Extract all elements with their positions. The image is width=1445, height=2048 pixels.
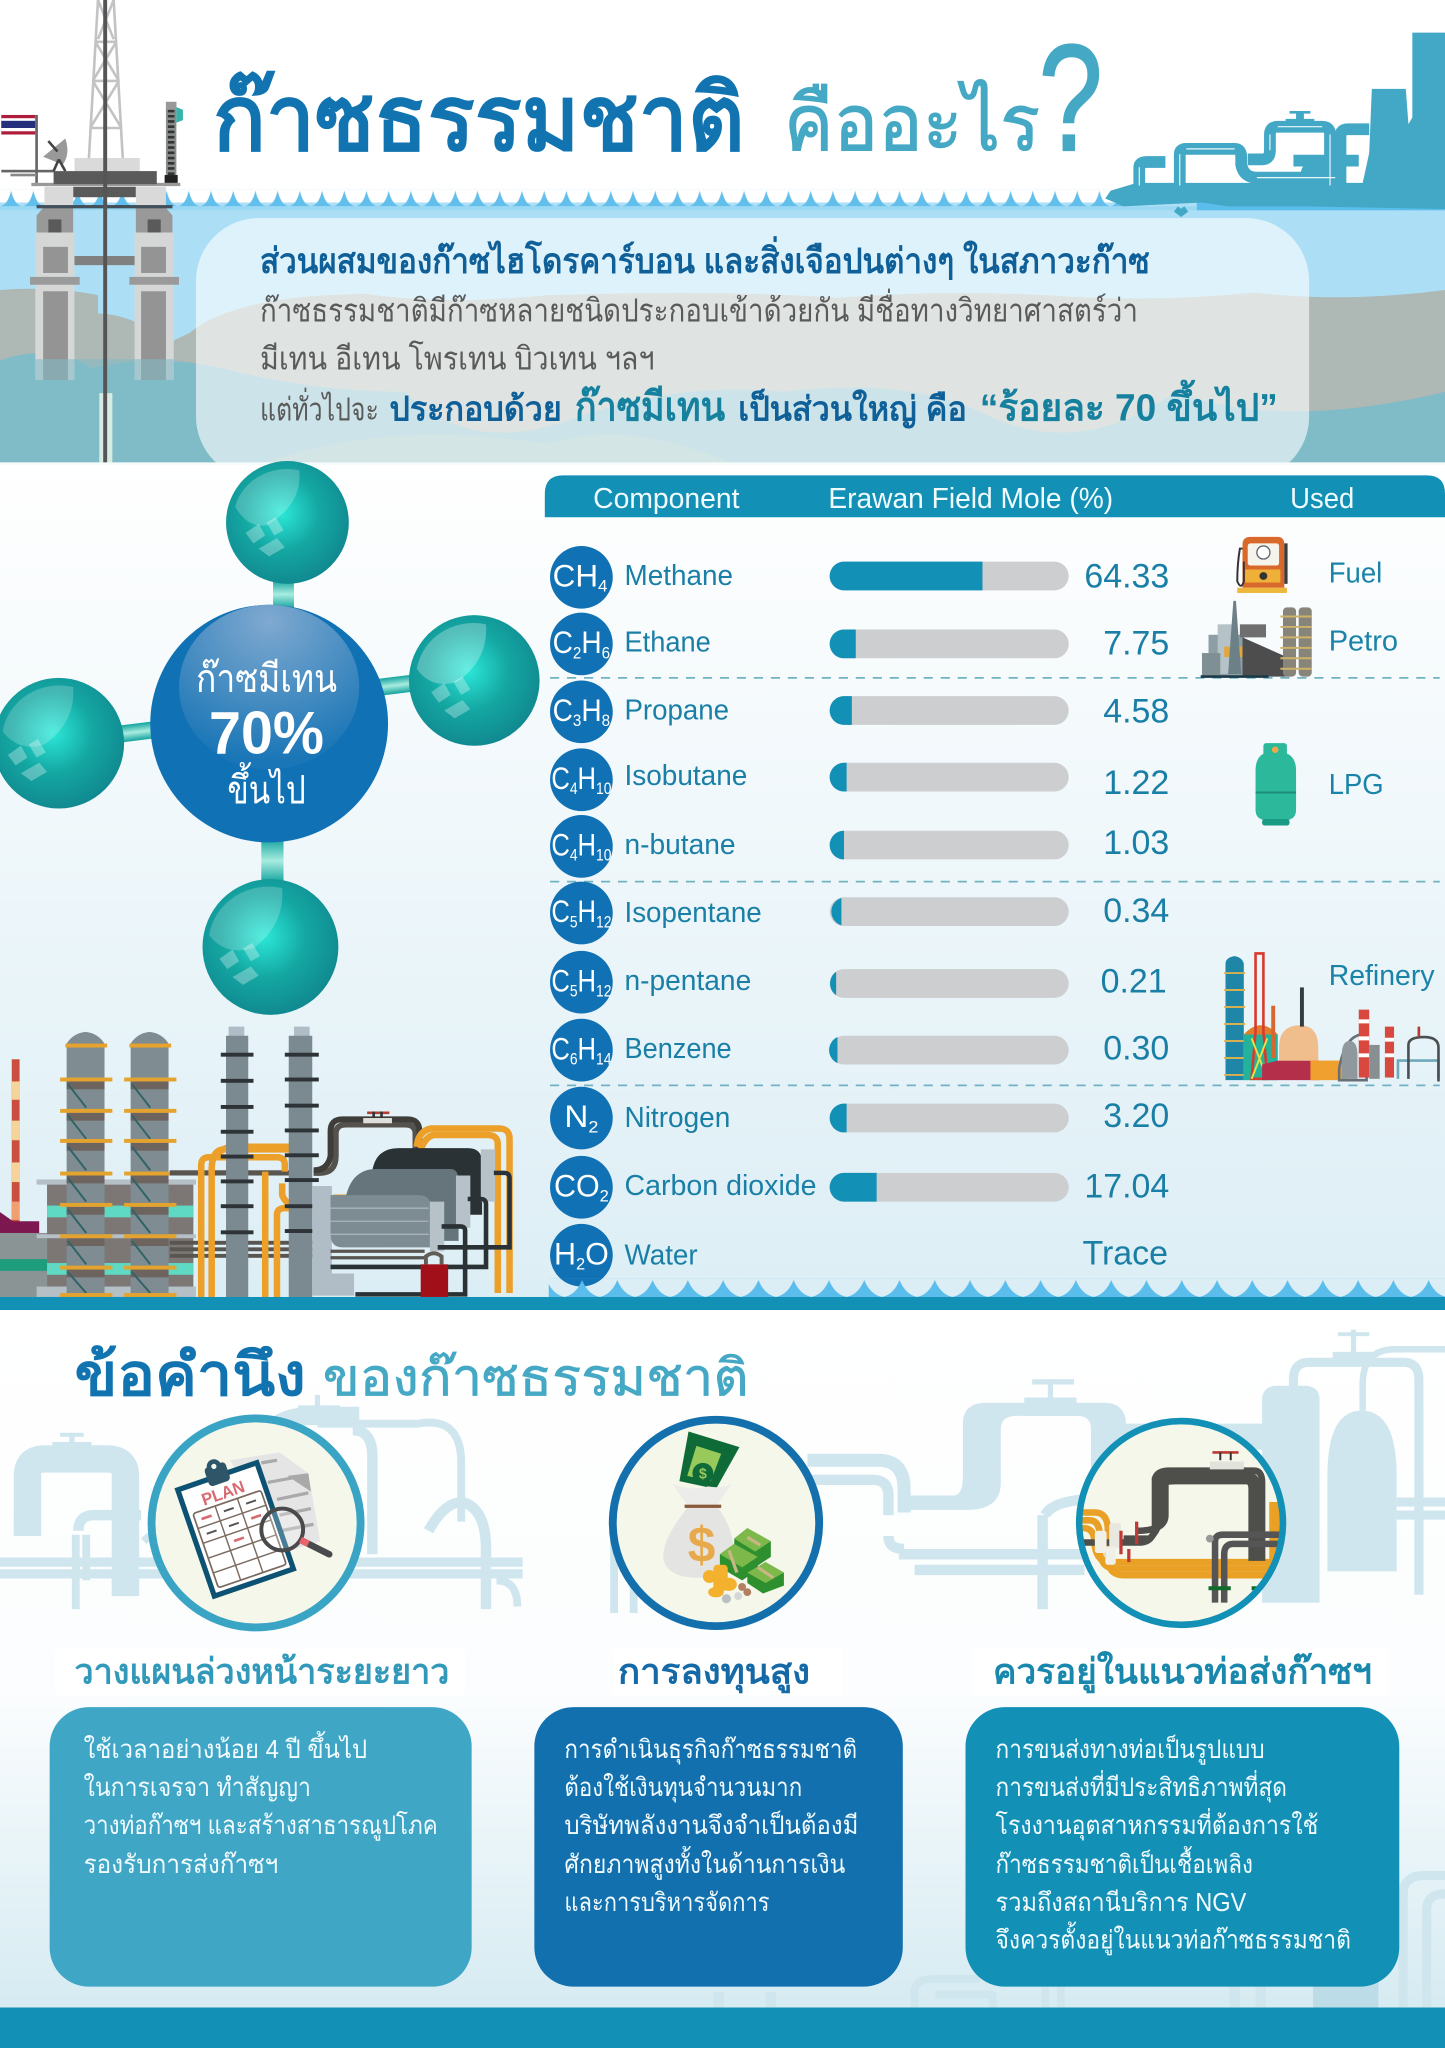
thai flag bbox=[1, 115, 38, 183]
row: isobutane: H bbox=[578, 761, 596, 796]
bag: $ bbox=[688, 1517, 715, 1573]
center atom: ก๊าซมีเทน bbox=[196, 658, 337, 701]
row: methane: 64.33 bbox=[1084, 558, 1169, 596]
title: ก๊าซธรรมชาติ bbox=[213, 68, 745, 170]
definition line 3: มีเทน อีเทน โพรเทน บิวเทน ฯลฯ bbox=[260, 341, 655, 377]
atom top bbox=[226, 461, 349, 584]
panel: planning text: ใช้เวลาอย่างน้อย 4 ปี ขึ้นไป bbox=[84, 1731, 367, 1764]
panel: planning text: ในการเจรจา ทำสัญญา bbox=[84, 1773, 311, 1802]
row: ethane: 7.75 bbox=[1103, 624, 1169, 662]
panel: pipeline text: จึงควรตั้งอยู่ในแนวท่อก๊าซธรรมชาติ bbox=[996, 1922, 1351, 1956]
atom right bbox=[409, 615, 540, 746]
definition line 4 bbox=[260, 380, 1278, 430]
label: petro: Petro bbox=[1329, 625, 1398, 657]
row: benzene: 14 bbox=[596, 1049, 611, 1068]
row: carbon dioxide: CO bbox=[554, 1168, 601, 1203]
row: n-pentane: C bbox=[551, 963, 574, 998]
row: nitrogen: N bbox=[564, 1099, 587, 1134]
center atom: ขึ้นไป bbox=[227, 761, 306, 812]
row: isopentane: H bbox=[578, 894, 596, 929]
row: benzene: 6 bbox=[570, 1049, 578, 1068]
row: isobutane: 1.22 bbox=[1103, 764, 1169, 802]
coins bbox=[703, 1565, 751, 1603]
row: nitrogen bbox=[550, 1087, 1169, 1149]
magnifier bbox=[261, 1509, 329, 1554]
row: water bbox=[550, 1224, 1168, 1287]
panel: planning text: รองรับการส่งก๊าซฯ bbox=[84, 1851, 278, 1879]
row: water: Trace bbox=[1082, 1234, 1168, 1272]
left pipes bbox=[0, 1395, 523, 1609]
row: ethane: 2 bbox=[573, 643, 581, 662]
table header bbox=[545, 475, 1445, 517]
row: isopentane: 0.34 bbox=[1103, 892, 1169, 930]
row: benzene: 0.30 bbox=[1103, 1029, 1169, 1067]
row: carbon dioxide: 17.04 bbox=[1084, 1168, 1169, 1206]
section divider bar bbox=[0, 1297, 1445, 1310]
subheading: long-term planning: วางแผนล่วงหน้าระยะยาว bbox=[74, 1653, 449, 1692]
row: n-butane bbox=[550, 815, 1169, 878]
subheading: high investment: การลงทุนสูง bbox=[618, 1653, 810, 1694]
row: n-butane: 1.03 bbox=[1103, 824, 1169, 862]
dark pipes bottom bbox=[331, 1173, 510, 1294]
row: n-butane: 4 bbox=[570, 846, 578, 865]
row: isobutane bbox=[550, 748, 1169, 811]
row: propane bbox=[550, 680, 1169, 743]
red box bbox=[421, 1264, 448, 1297]
row: isopentane bbox=[550, 882, 1169, 944]
row: ethane: H bbox=[581, 625, 602, 660]
row: methane: 4 bbox=[598, 577, 608, 596]
row: water: Water bbox=[625, 1239, 698, 1271]
row: ethane: C bbox=[553, 625, 575, 660]
row: methane bbox=[550, 546, 1169, 609]
row: isobutane: 4 bbox=[570, 779, 578, 798]
group dividers bbox=[550, 678, 1440, 1085]
label: fuel: Fuel bbox=[1329, 558, 1382, 590]
row: propane: H bbox=[581, 693, 602, 728]
row: nitrogen: Nitrogen bbox=[625, 1102, 730, 1134]
chimney bbox=[12, 1059, 20, 1233]
middle section background bbox=[0, 464, 1445, 1297]
center atom: 70% bbox=[209, 700, 324, 767]
refinery illustration bbox=[0, 1027, 510, 1297]
row: benzene: Benzene bbox=[625, 1033, 732, 1065]
orange pipes right bbox=[333, 1128, 510, 1293]
silhouette: gas plant bbox=[1105, 33, 1445, 213]
center atom bbox=[150, 605, 388, 842]
row: methane: CH bbox=[553, 558, 598, 593]
row: n-butane: H bbox=[578, 828, 596, 863]
stacks bbox=[221, 1027, 319, 1297]
banknote bbox=[679, 1432, 739, 1489]
row: n-butane: n-butane bbox=[625, 829, 736, 861]
subheading: along pipeline: ควรอยู่ในแนวท่อส่งก๊าซฯ bbox=[993, 1651, 1372, 1694]
row: water: H bbox=[554, 1236, 577, 1271]
background pipe silhouettes bbox=[0, 1330, 1445, 2008]
row: isobutane: Isobutane bbox=[625, 760, 747, 792]
panel: investment text bbox=[534, 1707, 903, 1987]
methane molecule bbox=[0, 461, 540, 1015]
panel: planning text: วางท่อก๊าซฯ และสร้างสาธารณูปโภค bbox=[84, 1811, 438, 1841]
orange pipe bundle bbox=[1074, 1512, 1287, 1575]
panel: investment text: ศักยภาพสูงทั้งในด้านการเงิน bbox=[564, 1846, 845, 1880]
icon: lpg cylinder bbox=[1256, 743, 1296, 825]
panel: investment text: ต้องใช้เงินทุนจำนวนมาก bbox=[564, 1773, 802, 1803]
row: propane: 4.58 bbox=[1103, 692, 1169, 730]
icon: petrochemical plant bbox=[1201, 601, 1312, 678]
orange pipes left bbox=[201, 1147, 294, 1297]
row: methane: Methane bbox=[625, 560, 733, 592]
subheading: high investment bbox=[613, 1648, 843, 1695]
pipe fittings bbox=[1095, 1452, 1244, 1565]
atom left bbox=[0, 678, 124, 808]
definition line 2: ก๊าซธรรมชาติมีก๊าซหลายชนิดประกอบเข้าด้วยกัน มีชื่อทางวิทยาศาสตร์ว่า bbox=[260, 288, 1138, 328]
row: n-pentane: n-pentane bbox=[625, 965, 751, 997]
row: n-butane: 10 bbox=[596, 846, 611, 865]
row: isobutane: 10 bbox=[596, 779, 611, 798]
table header: Used bbox=[1290, 483, 1354, 515]
valve bbox=[363, 1112, 392, 1123]
row: n-pentane: H bbox=[578, 963, 596, 998]
wave band bbox=[0, 189, 1445, 210]
panel: investment text: การดำเนินธุรกิจก๊าซธรรมชาติ bbox=[564, 1736, 857, 1765]
section heading: ของก๊าซธรรมชาติ bbox=[323, 1349, 749, 1406]
row: carbon dioxide: Carbon dioxide bbox=[625, 1170, 817, 1202]
panel: pipeline text: รวมถึงสถานีบริการ NGV bbox=[996, 1889, 1246, 1917]
row: isopentane: 12 bbox=[596, 912, 611, 931]
definition heading: ส่วนผสมของก๊าซไฮโดรคาร์บอน และสิ่งเจือปนต่างๆ ในสภาวะก๊าซ bbox=[260, 236, 1150, 281]
definition line 4: “ร้อยละ 70 ขึ้นไป” bbox=[980, 380, 1278, 430]
icon: pipeline bbox=[1074, 1421, 1287, 1625]
satellite dish bbox=[43, 138, 67, 171]
title bbox=[213, 14, 1103, 183]
definition line 4: แต่ทั่วไปจะ bbox=[260, 388, 379, 428]
bottom pipes bbox=[719, 1876, 1445, 2008]
row: propane: Propane bbox=[625, 695, 729, 727]
bottom waves of table bbox=[549, 1279, 1445, 1297]
cash stacks bbox=[720, 1528, 784, 1593]
header sea background bbox=[0, 202, 1445, 464]
bag bbox=[663, 1484, 733, 1578]
definition line 4: เป็นส่วนใหญ่ คือ bbox=[738, 388, 967, 430]
document bbox=[230, 1452, 320, 1552]
panel: pipeline text: การขนส่งทางท่อเป็นรูปแบบ bbox=[996, 1734, 1265, 1765]
icon: planning clipboard bbox=[152, 1418, 361, 1627]
row: n-pentane bbox=[550, 951, 1167, 1014]
row: propane: 8 bbox=[602, 711, 610, 730]
row: isopentane: C bbox=[551, 894, 574, 929]
title: ? bbox=[1039, 14, 1103, 183]
row: isopentane: Isopentane bbox=[625, 897, 762, 929]
panel: pipeline text bbox=[966, 1707, 1399, 1987]
horizontal tanks bbox=[331, 1148, 495, 1251]
row: ethane bbox=[550, 613, 1169, 675]
panel: pipeline text: การขนส่งที่มีประสิทธิภาพที่สุด bbox=[996, 1770, 1287, 1803]
panel: investment text: และการบริหารจัดการ bbox=[564, 1889, 770, 1917]
row: benzene bbox=[550, 1019, 1169, 1081]
row: ethane: 6 bbox=[602, 643, 610, 662]
panel: definition bbox=[196, 218, 1309, 479]
row: n-pentane: 12 bbox=[596, 982, 611, 1001]
row: propane: C bbox=[553, 693, 575, 728]
table header: Erawan Field Mole (%) bbox=[828, 483, 1113, 515]
row: nitrogen: 3.20 bbox=[1103, 1097, 1169, 1135]
row: carbon dioxide bbox=[550, 1156, 1169, 1219]
dark pipes top bbox=[314, 1119, 419, 1173]
row: nitrogen: 2 bbox=[588, 1117, 598, 1136]
icon: refinery bbox=[1224, 953, 1438, 1081]
banknote: $ bbox=[699, 1467, 707, 1483]
label: refinery: Refinery bbox=[1329, 960, 1435, 992]
row: water: O bbox=[585, 1236, 609, 1271]
row: isopentane: 5 bbox=[570, 912, 578, 931]
row: n-pentane: 5 bbox=[570, 982, 578, 1001]
centre pipes bbox=[614, 1379, 1126, 1613]
row: benzene: H bbox=[578, 1031, 596, 1066]
definition line 4: ก๊าซมีเทน bbox=[575, 384, 725, 430]
title: คืออะไร bbox=[784, 79, 1040, 167]
atom bottom bbox=[203, 879, 338, 1015]
row: n-butane: C bbox=[551, 828, 574, 863]
clipboard bbox=[170, 1445, 297, 1599]
row: propane: 3 bbox=[573, 711, 581, 730]
table header: Component bbox=[593, 483, 739, 515]
icon: money bag bbox=[613, 1420, 819, 1626]
lower section background bbox=[0, 1310, 1445, 2008]
right tanks bbox=[1124, 1330, 1445, 1603]
label: lpg: LPG bbox=[1329, 769, 1384, 801]
row: n-pentane: 0.21 bbox=[1101, 963, 1167, 1001]
row: water: 2 bbox=[576, 1255, 585, 1274]
section heading: ข้อคำนึง bbox=[74, 1343, 306, 1408]
panel: planning text bbox=[50, 1707, 472, 1987]
row: isobutane: C bbox=[551, 761, 574, 796]
row: carbon dioxide: 2 bbox=[600, 1187, 609, 1206]
panel: pipeline text: โรงงานอุตสาหกรรมที่ต้องการใช้ bbox=[996, 1808, 1318, 1841]
section heading bbox=[74, 1343, 749, 1408]
distillation towers bbox=[60, 1032, 176, 1297]
row: ethane: Ethane bbox=[625, 627, 711, 659]
rig tower bbox=[89, 0, 123, 159]
footer bar bbox=[0, 2008, 1445, 2048]
clipboard: PLAN bbox=[199, 1477, 247, 1510]
definition line 4: ประกอบด้วย bbox=[389, 391, 562, 429]
icon: fuel pump bbox=[1237, 537, 1288, 593]
dark pipe bundle bbox=[1074, 1471, 1262, 1561]
row: benzene: C bbox=[551, 1031, 574, 1066]
crane bbox=[165, 102, 183, 183]
panel: pipeline text: ก๊าซธรรมชาติเป็นเชื้อเพลิง bbox=[996, 1846, 1253, 1879]
panel: investment text: บริษัทพลังงานจึงจำเป็นต้องมี bbox=[564, 1810, 858, 1840]
offshore rig bbox=[1, 0, 183, 464]
